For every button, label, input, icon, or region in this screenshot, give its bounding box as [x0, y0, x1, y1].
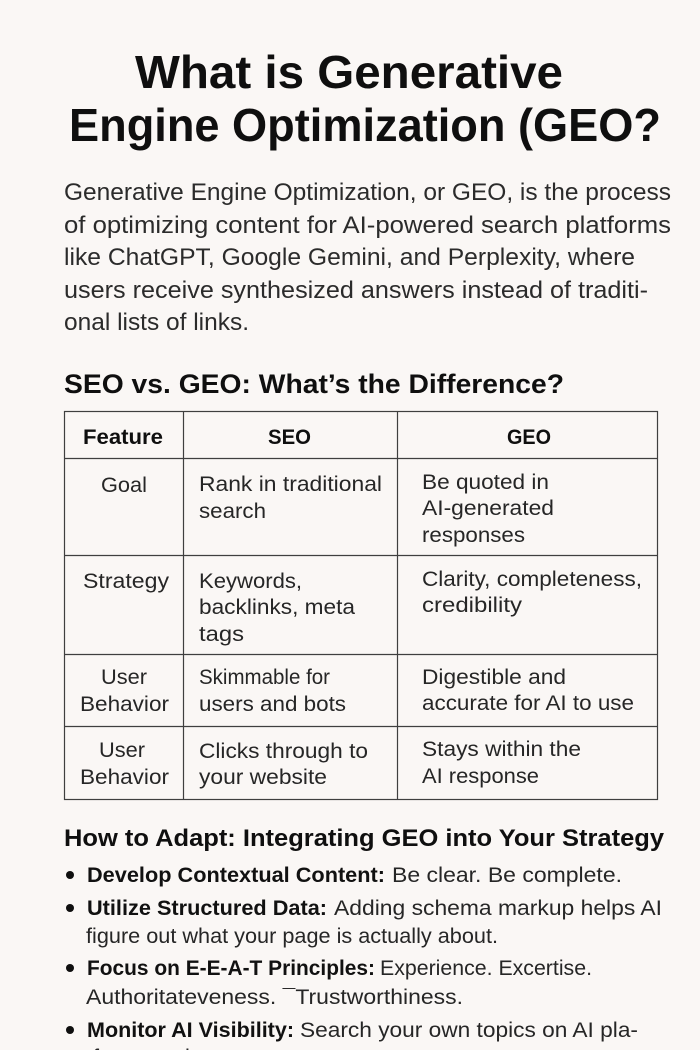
row: User Behavior (clicks): your website — [199, 765, 327, 789]
row: User Behavior (skimmable): users and bots — [199, 692, 346, 716]
row: User Behavior (skimmable): Digestible and — [422, 665, 566, 689]
bullet: Focus on E-E-A-T Principles: Experience. Excertise. — [380, 957, 592, 980]
bullet: Develop Contextual Content — [66, 864, 622, 887]
row: User Behavior (clicks): AI response — [422, 764, 539, 788]
intro paragraph: onal lists of links. — [64, 309, 249, 336]
table header row: Feature — [83, 425, 163, 449]
intro paragraph: of optimizing content for AI-powered search platforms — [64, 212, 671, 239]
row: User Behavior (clicks): Stays within the — [422, 737, 581, 761]
heading: SEO vs. GEO: SEO vs. GEO: What’s the Difference? — [64, 369, 564, 399]
intro paragraph: like ChatGPT, Google Gemini, and Perplexity, where — [64, 244, 635, 271]
bullet: Monitor AI Visibility: Search your own topics on AI pla- — [300, 1019, 638, 1042]
row: User Behavior (skimmable): Skimmable for — [199, 665, 330, 689]
heading: How to Adapt: How to Adapt: Integrating GEO into Your Strategy — [64, 825, 665, 852]
row: User Behavior (skimmable): User — [101, 665, 147, 689]
bullet: Develop Contextual Content: Develop Contextual Content: — [87, 864, 385, 887]
bullet: Utilize Structured Data: Utilize Structured Data: — [87, 897, 327, 920]
title — [69, 46, 661, 151]
row: Strategy — [83, 567, 642, 646]
row: Goal: Rank in traditional — [199, 472, 382, 496]
row: Strategy: credibility — [422, 593, 522, 617]
bullet: Develop Contextual Content: Be clear. Be complete. — [392, 864, 622, 887]
table header row: GEO — [507, 425, 551, 449]
row: Goal: search — [199, 499, 266, 523]
row: Goal: responses — [422, 523, 525, 547]
bullet: Focus on E-E-A-T Principles: Authoritateveness. ¯Trustworthiness. — [86, 986, 463, 1009]
row: Strategy: Clarity, completeness, — [422, 567, 642, 591]
bullet: Focus on E-E-A-T Principles — [66, 957, 592, 1009]
row: Goal: Be quoted in — [422, 470, 549, 494]
intro paragraph: Generative Engine Optimization, or GEO, is the process — [64, 179, 671, 206]
row: Goal: AI-generated — [422, 496, 554, 520]
bullet: Utilize Structured Data: Adding schema markup helps AI — [334, 897, 662, 920]
row: User Behavior (skimmable) — [80, 665, 634, 716]
title: What is Generative — [135, 46, 563, 98]
row: Strategy: tags — [199, 622, 244, 646]
row: User Behavior (clicks): Behavior — [80, 765, 169, 789]
row: User Behavior (skimmable): accurate for AI to use — [422, 691, 634, 715]
row: Goal — [101, 470, 554, 547]
bullet list — [66, 864, 662, 1050]
bullet: Utilize Structured Data — [66, 897, 662, 948]
bullet: Utilize Structured Data: figure out what your page is actually about. — [86, 925, 498, 948]
row: User Behavior (clicks): Clicks through to — [199, 739, 368, 763]
row: Strategy: Keywords, — [199, 569, 302, 593]
table header row — [83, 425, 551, 449]
row: Goal: Goal — [101, 473, 147, 497]
bullet: Monitor AI Visibility: Monitor AI Visibility: — [87, 1019, 294, 1042]
row: User Behavior (clicks): User — [99, 738, 145, 762]
table grid — [64, 411, 658, 800]
intro paragraph: users receive synthesized answers instead of traditi- — [64, 277, 648, 304]
row: Strategy: backlinks, meta — [199, 595, 355, 619]
title: Engine Optimization (GEO? — [69, 99, 661, 151]
bullet: Monitor AI Visibility — [66, 1019, 638, 1050]
intro paragraph — [64, 179, 671, 336]
row: User Behavior (clicks) — [80, 737, 581, 789]
bullet: Focus on E-E-A-T Principles: Focus on E-E-A-T Principles: — [87, 957, 375, 980]
table header row: SEO — [268, 425, 311, 449]
row: User Behavior (skimmable): Behavior — [80, 692, 169, 716]
row: Strategy: Strategy — [83, 569, 169, 593]
comparison table — [64, 411, 658, 800]
